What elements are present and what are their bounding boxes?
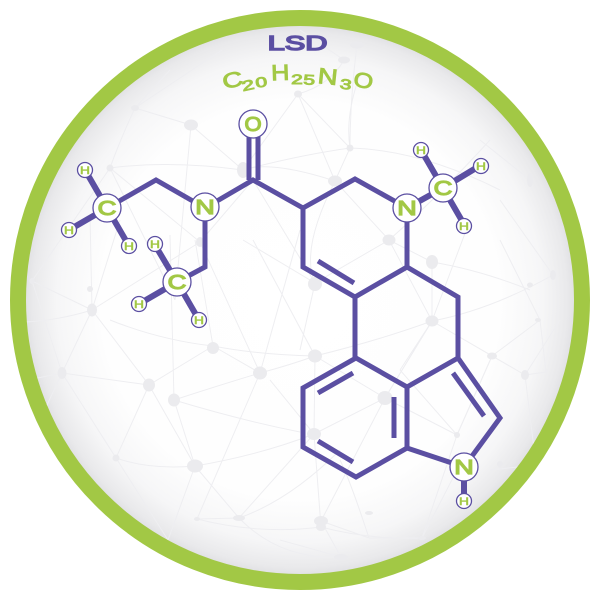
hydrogen atoms: H — [64, 224, 74, 237]
chemical formula: N — [317, 64, 339, 90]
atom: oxygen: O — [244, 114, 262, 136]
five-member inner bond — [453, 373, 484, 416]
chemical formula: H — [271, 61, 290, 86]
atom: nitrogen indole: N — [454, 456, 474, 479]
hydrogen atoms: H — [459, 495, 469, 508]
chemical formula: O — [351, 67, 376, 94]
atom: carbon right — [429, 174, 457, 202]
methyl and hydrogen bonds — [69, 150, 481, 501]
ring C inner double bond — [318, 261, 354, 283]
network nodes — [62, 56, 541, 531]
hydrogen atoms: H — [80, 164, 90, 177]
chemical formula: 2 — [291, 71, 303, 87]
atom: nitrogen ring: N — [397, 197, 417, 220]
N-ethyl arm — [177, 207, 205, 282]
atom: carbon lower — [163, 268, 191, 296]
aromatic inner bonds — [318, 373, 394, 462]
carbonyl double bond — [249, 135, 258, 180]
hydrogen atoms: H — [150, 238, 160, 251]
atom: oxygen — [239, 110, 267, 138]
chemical formula: 0 — [254, 74, 268, 91]
six-member aromatic ring — [303, 358, 407, 477]
chemical formula: 3 — [339, 76, 353, 93]
ring C — [303, 179, 407, 297]
atom: carbon lower: C — [168, 271, 186, 293]
ring D link — [355, 267, 458, 358]
atom: nitrogen amide: N — [195, 196, 215, 219]
amide chain — [107, 180, 303, 208]
atom: carbon left — [93, 194, 121, 222]
five-member ring — [407, 358, 500, 467]
hydrogen atoms — [62, 142, 488, 508]
atom: nitrogen ring — [393, 194, 421, 222]
atom: carbon left: C — [98, 197, 116, 219]
hydrogen atoms: H — [476, 160, 486, 173]
title: LSD: LSD — [268, 31, 327, 55]
hydrogen atoms: H — [459, 220, 469, 233]
molecular skeleton bonds — [69, 135, 500, 501]
chemical formula: C — [220, 67, 245, 94]
chemical formula — [220, 61, 376, 94]
atom: carbon right: C — [434, 177, 452, 199]
hydrogen atoms: H — [124, 240, 134, 253]
atom: nitrogen amide — [191, 193, 219, 221]
chemical formula: 5 — [303, 72, 316, 88]
hydrogen atoms: H — [416, 144, 426, 157]
hydrogen atoms: H — [194, 314, 204, 327]
background network mesh — [26, 56, 541, 542]
chemical formula: 2 — [240, 76, 256, 94]
atom: nitrogen indole — [450, 453, 478, 481]
hydrogen atoms: H — [134, 298, 144, 311]
